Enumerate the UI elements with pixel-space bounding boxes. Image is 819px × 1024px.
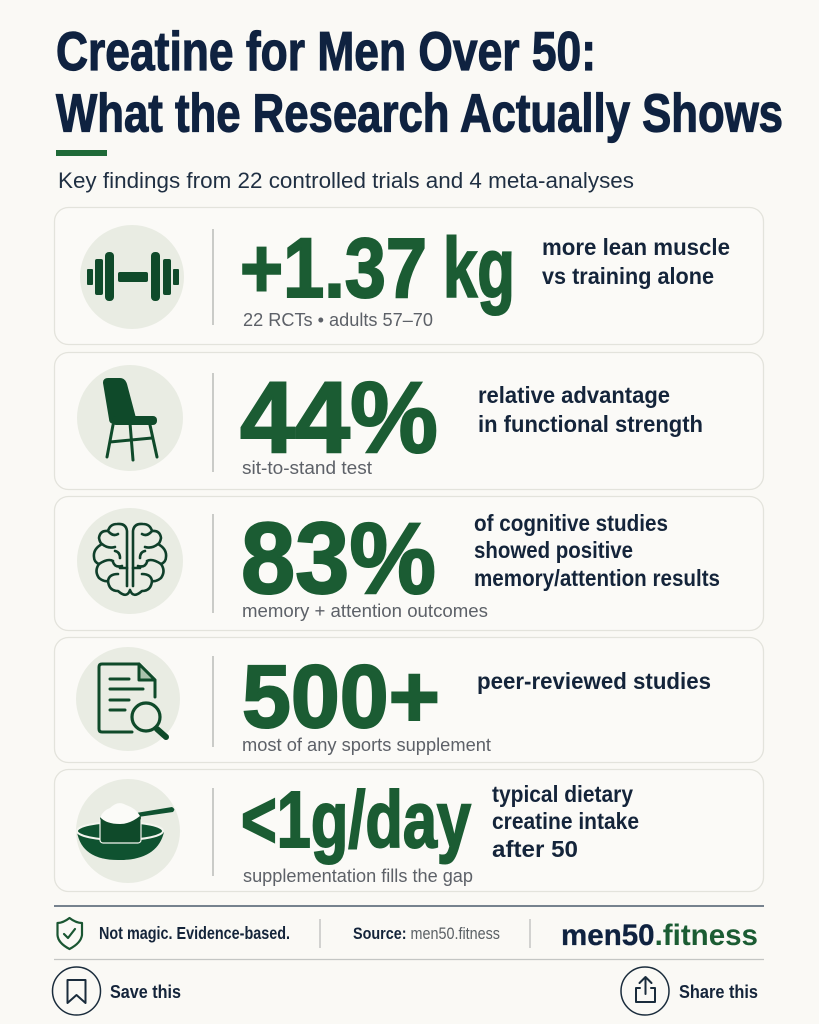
icon: brain: [77, 508, 183, 614]
description: of cognitive studies: [474, 510, 668, 536]
divider: [212, 788, 214, 876]
brand logo: men50.fitness: [561, 919, 758, 952]
share button: [621, 967, 758, 1015]
description: typical dietary: [492, 781, 633, 807]
footer tagline: Not magic. Evidence-based.: [99, 923, 290, 943]
icon: chair: [77, 365, 183, 471]
caption: most of any sports supplement: [242, 735, 491, 755]
panel: lean muscle: [54, 208, 764, 344]
share label: Share this: [679, 981, 758, 1002]
description: creatine intake: [492, 808, 639, 834]
description: in functional strength: [478, 411, 703, 437]
footer divider left: [319, 919, 321, 948]
title: [56, 20, 783, 144]
description: more lean muscle: [542, 234, 730, 260]
caption: 22 RCTs • adults 57–70: [243, 310, 433, 330]
title: Creatine for Men Over 50:: [56, 20, 596, 82]
icon: creatine scoop and bowl: [76, 779, 180, 883]
divider: [212, 656, 214, 747]
divider: [212, 514, 214, 613]
panel: cognitive studies: [54, 496, 764, 630]
description: after 50: [492, 836, 578, 862]
footer divider right: [529, 919, 531, 948]
description: [492, 781, 639, 862]
description: memory/attention results: [474, 565, 720, 591]
caption: sit-to-stand test: [242, 458, 372, 478]
description: [478, 382, 703, 437]
big number: 500+: [242, 646, 440, 746]
footer lower rule: [54, 958, 764, 960]
description: [474, 510, 720, 591]
description: showed positive: [474, 537, 633, 563]
big number: 83%: [241, 503, 436, 615]
caption: memory + attention outcomes: [242, 601, 488, 621]
description: [542, 234, 730, 289]
caption: supplementation fills the gap: [243, 866, 473, 886]
big number: 44%: [240, 362, 438, 474]
divider: [212, 373, 214, 472]
icon: share: [621, 967, 669, 1015]
footer source: Source: men50.fitness: [353, 925, 500, 943]
icon: document with magnifier: [76, 647, 180, 751]
description: vs training alone: [542, 263, 714, 289]
panel: functional strength: [54, 352, 764, 490]
big number: +1.37: [240, 221, 427, 315]
description: peer-reviewed studies: [477, 668, 711, 694]
big number: kg: [443, 221, 515, 315]
divider: [212, 229, 214, 325]
big number: <1g/day: [241, 775, 471, 864]
save label: Save this: [110, 981, 181, 1002]
icon: shield check: [58, 918, 82, 949]
subtitle: Key findings from 22 controlled trials and 4 meta-analyses: [58, 168, 634, 193]
icon: dumbbell: [80, 225, 184, 329]
panel: peer-reviewed studies: [54, 638, 764, 762]
save button: [52, 967, 181, 1015]
description: relative advantage: [478, 382, 670, 408]
title accent bar: [56, 150, 107, 156]
footer rule: [54, 905, 764, 907]
panel: dietary intake: [54, 770, 764, 892]
icon: bookmark: [52, 967, 100, 1015]
